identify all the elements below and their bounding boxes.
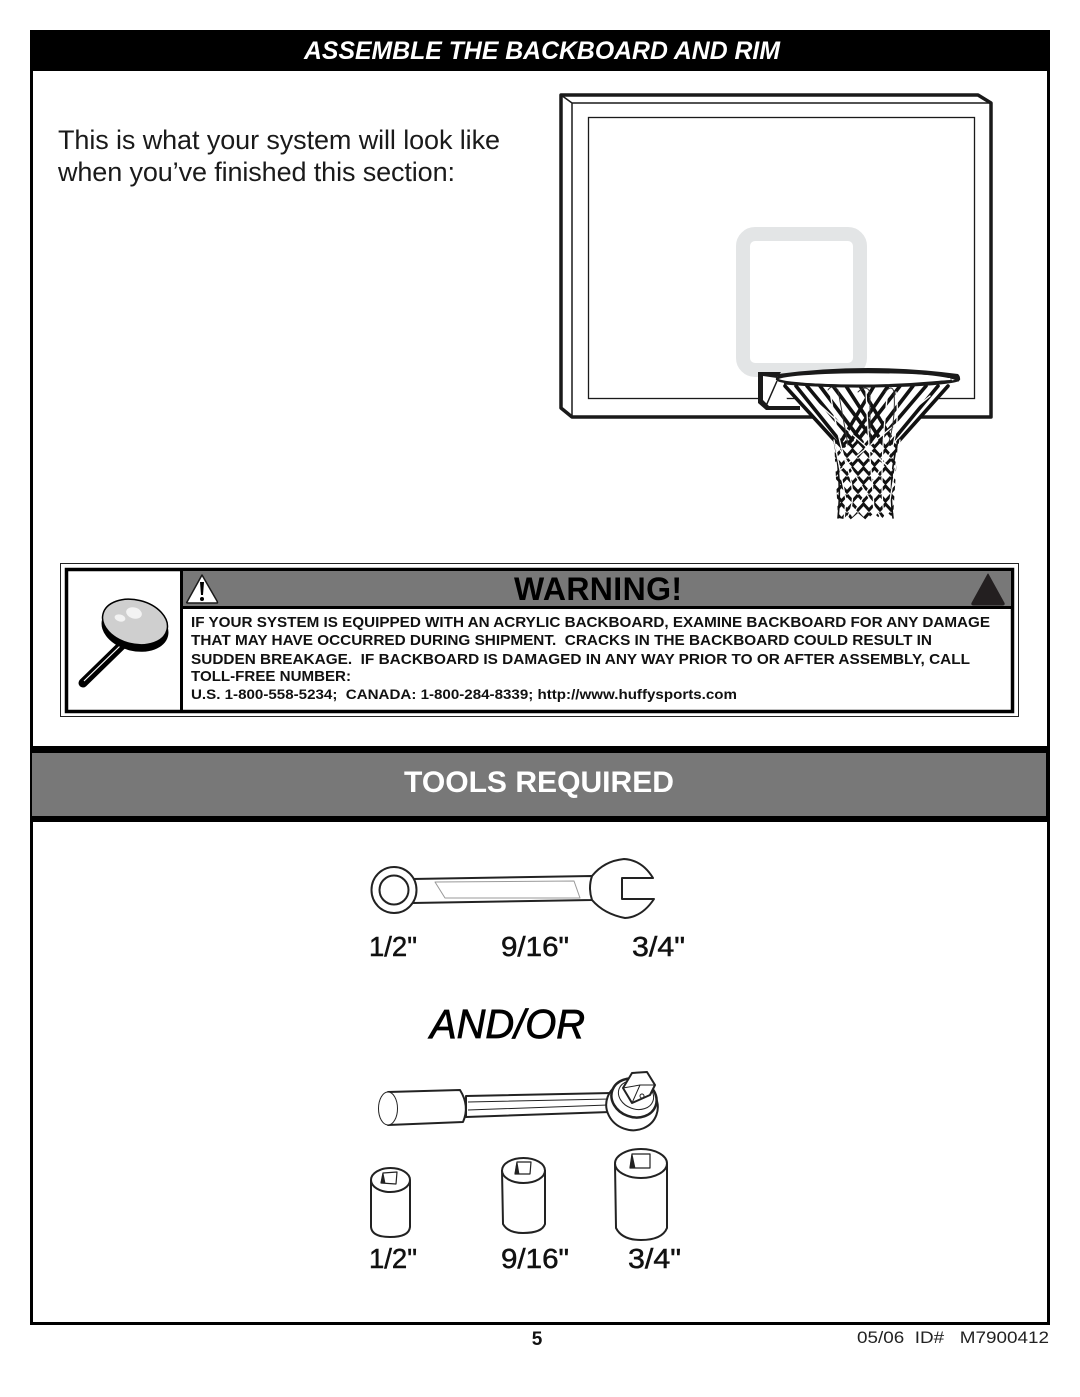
- warning title bar: [183, 571, 1012, 609]
- warning text: IF YOUR SYSTEM IS EQUIPPED WITH AN ACRYLIC BACKBOARD, EXAMINE BACKBOARD FOR ANY DAMAGE: [191, 614, 990, 631]
- size labels: wrench: 3/4": [632, 931, 685, 962]
- warning text: SUDDEN BREAKAGE. IF BACKBOARD IS DAMAGED IN ANY WAY PRIOR TO OR AFTER ASSEMBLY, CALL: [191, 651, 970, 668]
- shooter square: [743, 234, 860, 370]
- warning panel: [60, 564, 1018, 716]
- icon: warning triangle solid: [972, 574, 1004, 605]
- warning text: TOLL-FREE NUMBER:: [191, 668, 351, 685]
- icon: sockets: [371, 1149, 667, 1240]
- warning text: U.S. 1-800-558-5234; CANADA: 1-800-284-8339; http://www.huffysports.com: [191, 686, 737, 702]
- intro text: when you’ve finished this section:: [57, 157, 455, 187]
- section header: assemble the backboard and rim: [30, 30, 1050, 71]
- icon: warning triangle outline: [187, 575, 218, 603]
- warning text: [191, 614, 990, 702]
- net: [783, 384, 950, 520]
- size labels: sockets: [369, 1243, 681, 1274]
- section header: assemble the backboard and rim: ASSEMBLE THE BACKBOARD AND RIM: [303, 37, 781, 65]
- rim bracket: [758, 372, 800, 410]
- icon: ratchet: [378, 1072, 665, 1137]
- illustration: backboard and rim: [561, 95, 991, 520]
- warning title bar: WARNING!: [514, 571, 682, 607]
- and/or: AND/OR: [427, 1001, 585, 1047]
- icon: magnifying glass: [83, 593, 174, 683]
- rim: [777, 368, 960, 386]
- size labels: sockets: 9/16": [501, 1243, 569, 1274]
- warning divider: [180, 570, 183, 711]
- size labels: sockets: 1/2": [369, 1243, 417, 1274]
- warning text: THAT MAY HAVE OCCURRED DURING SHIPMENT. CRACKS IN THE BACKBOARD COULD RESULT IN: [191, 632, 932, 649]
- backboard: [561, 95, 991, 417]
- size labels: sockets: 3/4": [628, 1243, 681, 1274]
- icon: combination wrench: [372, 859, 654, 918]
- size labels: wrench: 1/2": [369, 931, 417, 962]
- tools required banner: TOOLS REQUIRED: [404, 766, 674, 799]
- page number: 5: [532, 1329, 543, 1350]
- size labels: wrench: [369, 931, 685, 962]
- intro text: This is what your system will look like: [58, 125, 500, 155]
- document id: 05/06 ID# M7900412: [857, 1328, 1049, 1347]
- size labels: wrench: 9/16": [501, 931, 569, 962]
- tools required banner: [30, 746, 1050, 822]
- intro text: [57, 125, 500, 187]
